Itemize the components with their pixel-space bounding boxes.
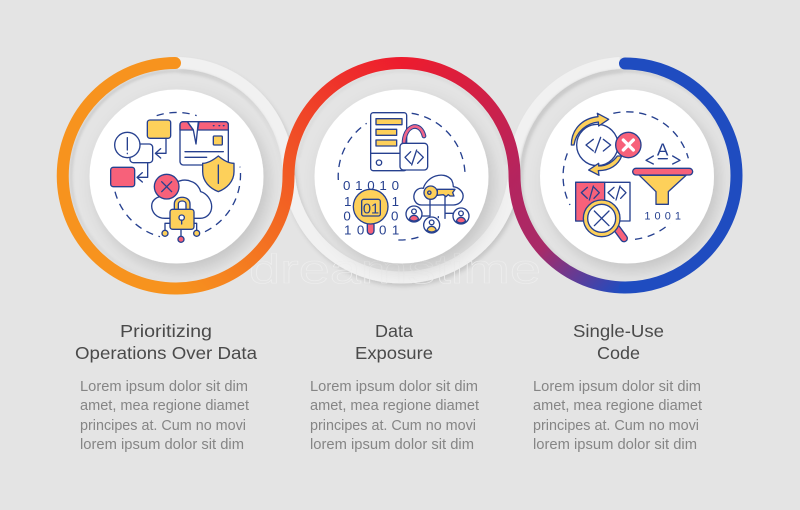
text: data exposure: principes at. Cum no movi <box>310 417 476 434</box>
text: single-use code: principes at. Cum no movi <box>533 417 699 434</box>
icon: data exposure: 10 01 <box>344 223 399 238</box>
text: data exposure: Data <box>375 321 413 341</box>
text: single-use code: Code <box>597 343 640 363</box>
icon: prioritizing operations over data <box>111 112 241 242</box>
text: prioritizing operations over data: Lorem ipsum dolor sit dim <box>80 378 248 395</box>
text: single-use code: lorem ipsum dolor sit dim <box>533 436 697 453</box>
icon: single-use code <box>563 112 693 239</box>
watermark: dreamstime <box>249 246 541 292</box>
white discs <box>90 90 714 264</box>
icon: data exposure: 1 <box>392 194 399 209</box>
text: single-use code <box>533 321 703 453</box>
text: data exposure: amet, mea regione diamet <box>310 397 480 414</box>
text: single-use code: Lorem ipsum dolor sit dim <box>533 378 701 395</box>
light ring backgrounds <box>71 54 731 298</box>
text: single-use code: amet, mea regione diamet <box>533 397 703 414</box>
text: data exposure <box>310 321 480 453</box>
timeline loop ribbon <box>63 63 737 289</box>
text: prioritizing operations over data <box>75 321 257 453</box>
icon: single-use code: A <box>657 139 669 159</box>
text: prioritizing operations over data: amet, mea regione diamet <box>80 397 250 414</box>
text: data exposure: Exposure <box>355 343 433 363</box>
text: prioritizing operations over data: Prioritizing <box>120 321 212 341</box>
icon: data exposure: 0 <box>343 208 351 223</box>
text: single-use code: Single-Use <box>573 321 664 341</box>
text: prioritizing operations over data: Operations Over Data <box>75 343 257 363</box>
text: data exposure: lorem ipsum dolor sit dim <box>310 436 474 453</box>
icon: single-use code: 1001 <box>644 210 681 222</box>
text: prioritizing operations over data: principes at. Cum no movi <box>80 417 246 434</box>
text: data exposure: Lorem ipsum dolor sit dim <box>310 378 478 395</box>
icon: data exposure: 1 <box>344 194 351 209</box>
icon: data exposure: 01 <box>363 201 379 217</box>
icon: data exposure: 01010 <box>343 178 399 193</box>
text: prioritizing operations over data: lorem ipsum dolor sit dim <box>80 436 244 453</box>
icon: data exposure: 0 <box>391 208 398 223</box>
icon: data exposure <box>338 113 469 240</box>
